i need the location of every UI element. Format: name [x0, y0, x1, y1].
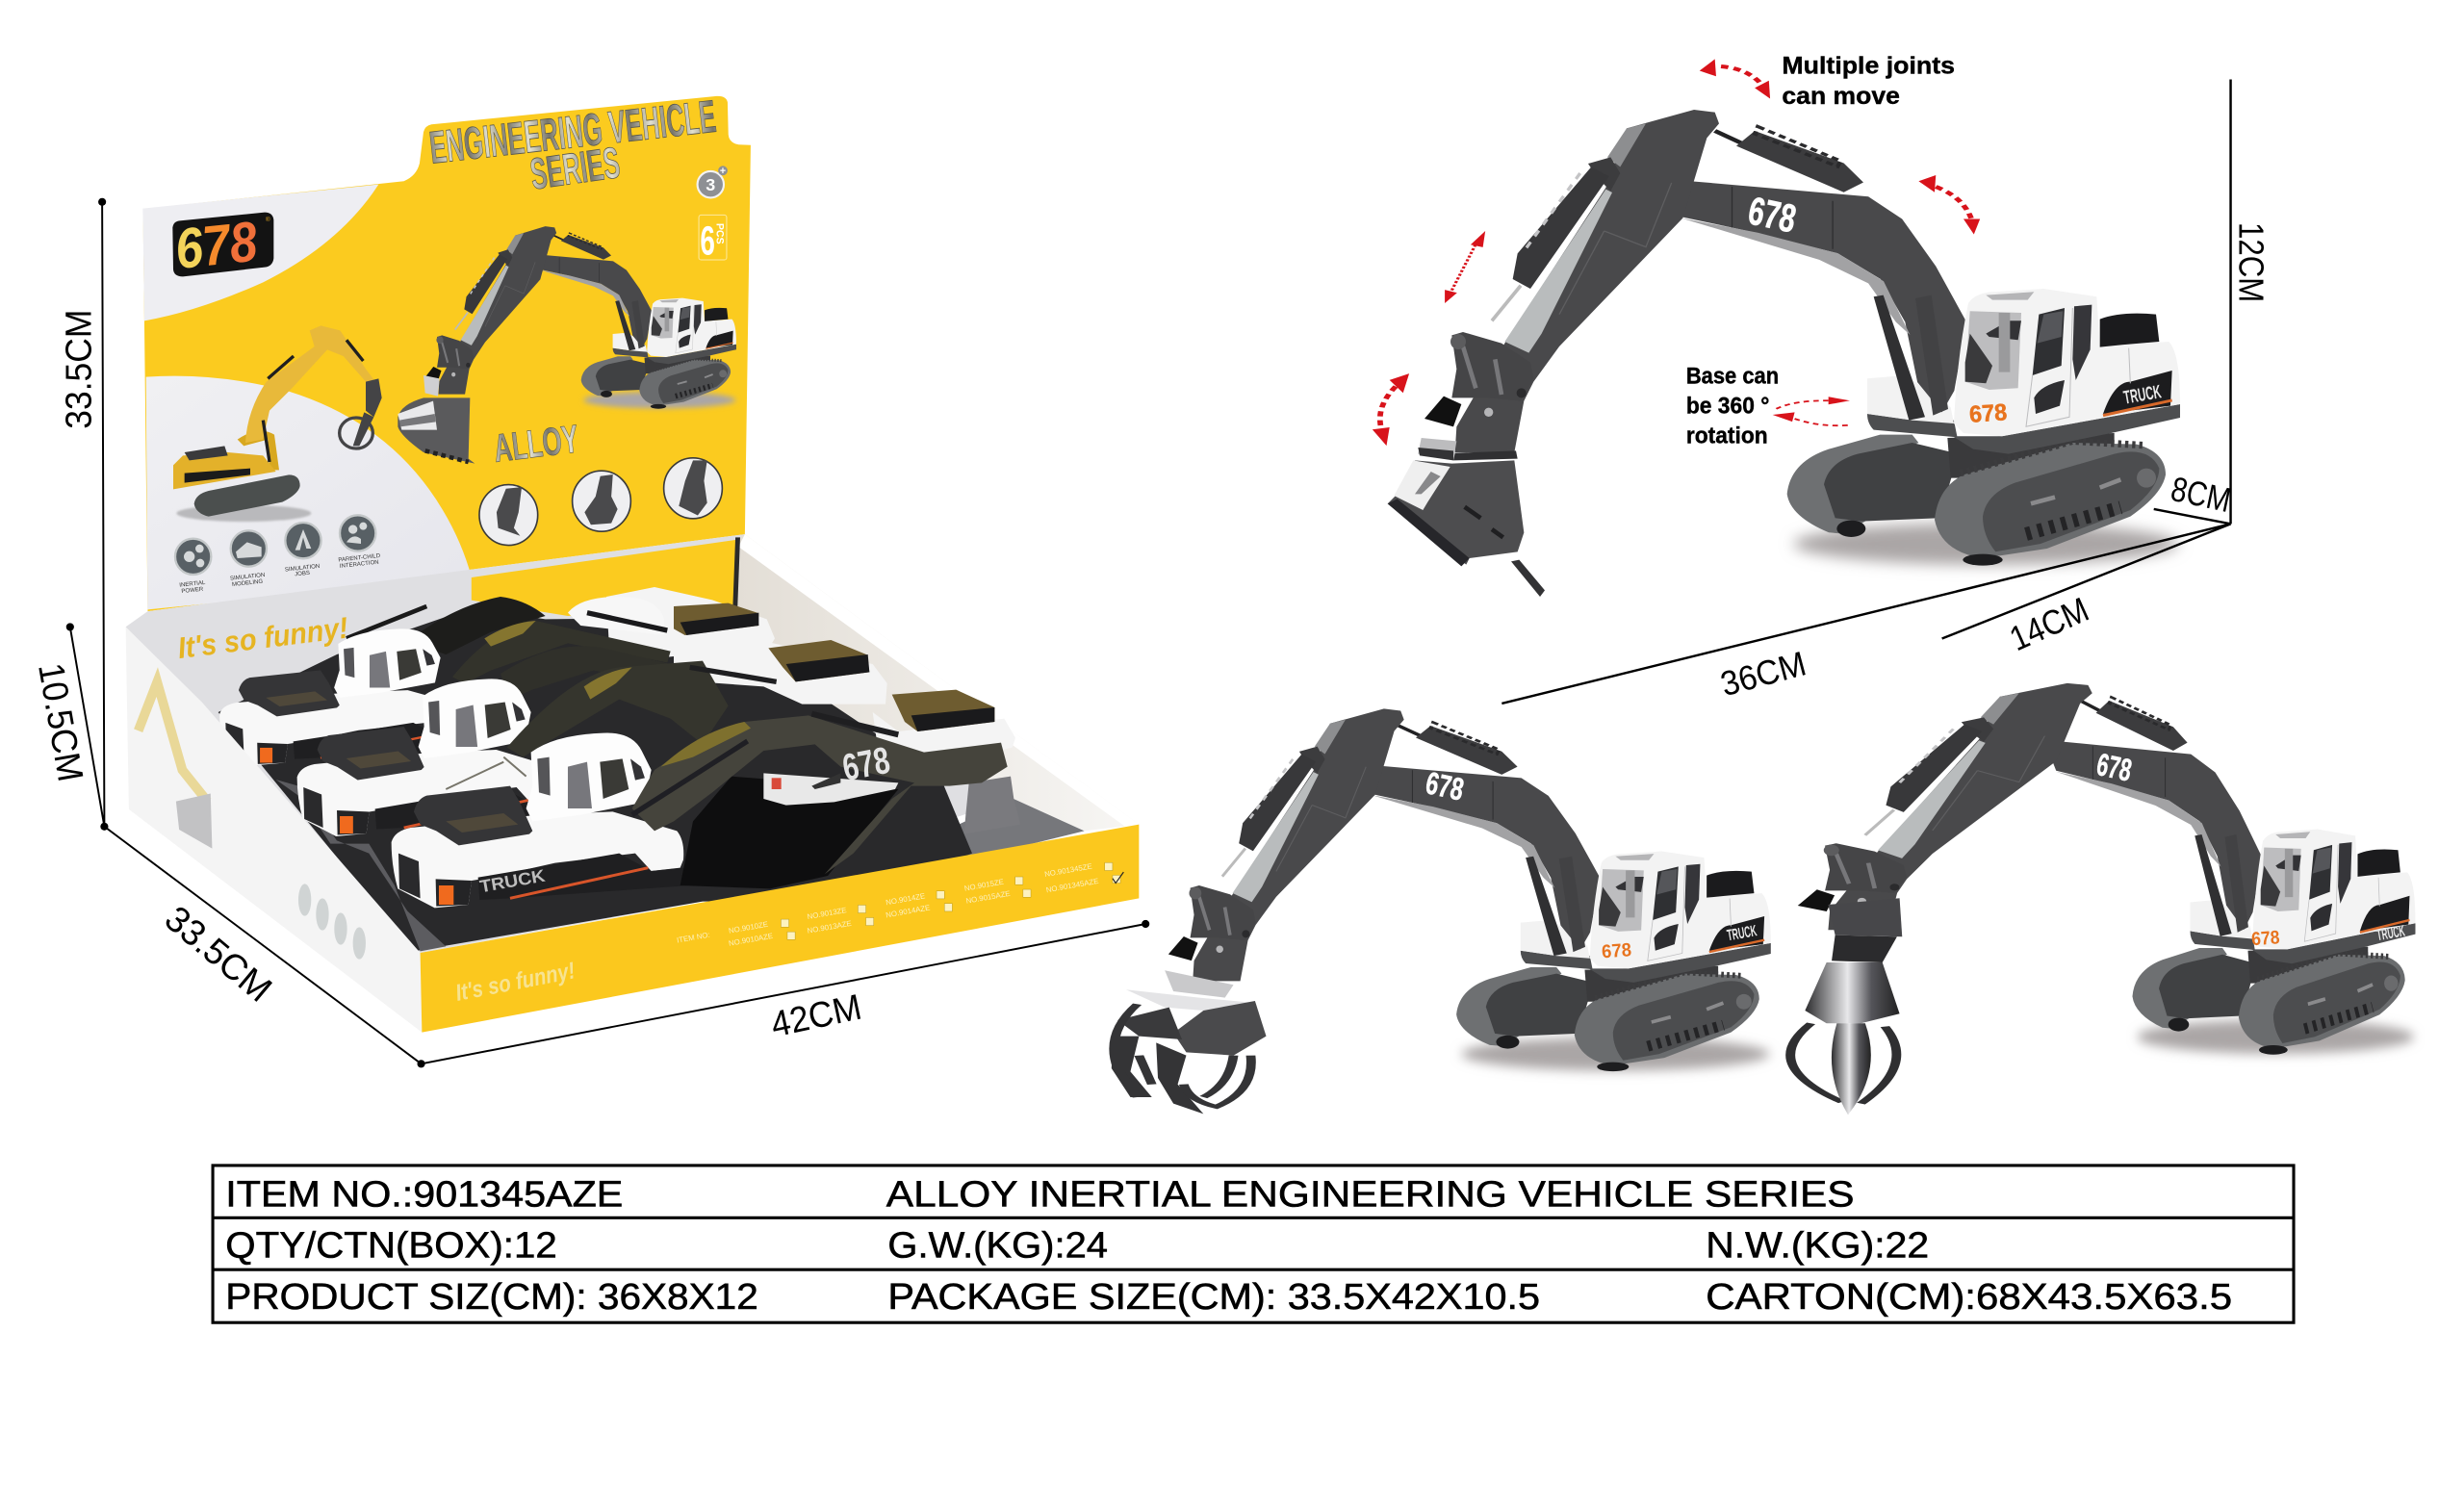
item number list: [676, 861, 1099, 948]
feature captions: SIMULATION: [285, 564, 321, 574]
left tray wall: [126, 627, 422, 1033]
item number list: NO.901345AZE: [1045, 877, 1099, 894]
six pieces badge: 6: [700, 218, 715, 263]
yellow excavator on box: [173, 325, 382, 522]
six pieces badge: PCS: [713, 223, 725, 244]
boom logo: 678: [2093, 746, 2135, 788]
main excavator with breaker: [1388, 110, 2180, 597]
front toy truck label: TRUCK: [478, 866, 547, 896]
table row 3: [225, 1276, 2232, 1317]
front panel slogan: It's so funny!: [453, 958, 578, 1007]
age badge: [698, 166, 728, 197]
feature captions: SIMULATION: [230, 573, 266, 582]
age badge: +: [720, 166, 726, 177]
table grid: [213, 1166, 2294, 1322]
white top-left swoosh: [142, 185, 378, 320]
table row 3: CARTON(CM):68X43.5X63.5: [1706, 1276, 2232, 1317]
table row 2: QTY/CTN(BOX):12: [225, 1225, 557, 1266]
tray slogan: It's so funny!: [176, 611, 350, 665]
product dimension labels: 36CM: [1716, 643, 1810, 704]
ALLOY label: ALLOY: [491, 417, 581, 471]
callout: multiple joints: can move: [1782, 83, 1900, 110]
excavator body: [1362, 723, 1771, 1071]
table row 2: G.W.(KG):24: [887, 1225, 1108, 1266]
item number list: NO.9010AZE: [728, 932, 774, 948]
breaker attachment: [1388, 438, 1545, 597]
feature captions: PARENT-CHILD: [338, 553, 381, 564]
wood grapple: [1112, 970, 1267, 1114]
excavator with chrome grab: [1790, 683, 2415, 1114]
right tray wall: [732, 534, 1139, 861]
callout: multiple joints: Multiple joints: [1782, 53, 1955, 80]
callout: base rotation: be 360 °: [1686, 393, 1769, 419]
feature captions: [179, 553, 381, 595]
cab logo: 678: [1968, 399, 2008, 428]
boom logo: 678: [1745, 188, 1800, 242]
table row 2: N.W.(KG):22: [1706, 1225, 1929, 1266]
back row engine covers: [606, 587, 1020, 879]
cab logo: 678: [2250, 927, 2280, 950]
brand logo: 678: [172, 211, 261, 281]
truck label: TRUCK: [2122, 381, 2163, 409]
tray floor: [218, 608, 972, 951]
front yellow panel: [421, 825, 1139, 1033]
age badge: 3: [706, 175, 715, 194]
back panel with header tab: [143, 96, 751, 611]
feature captions: INERTIAL: [179, 580, 206, 589]
item number list: NO.9015ZE: [963, 878, 1005, 893]
front toy boom logo: 678: [839, 740, 893, 789]
feature captions: POWER: [181, 587, 204, 595]
attachment icons: [479, 458, 722, 546]
brand logo: ®: [266, 216, 270, 223]
product dimension labels: 14CM: [2004, 589, 2094, 658]
box dimension labels: 10.5CM: [31, 660, 91, 784]
box dimension labels: 42CM: [767, 986, 865, 1044]
table row 3: PRODUCT SIZ(CM): 36X8X12: [225, 1276, 758, 1317]
callout: base rotation: Base can: [1686, 363, 1779, 389]
feature captions: JOBS: [295, 571, 310, 577]
item number list: NO.9015AZE: [965, 889, 1011, 906]
item number list: NO.9014AZE: [886, 903, 931, 919]
product dimension labels: 12CM: [2232, 222, 2272, 302]
excavator arm: [1798, 683, 2092, 930]
item number list: NO.9010ZE: [728, 920, 769, 935]
excavator with grapple: [1112, 708, 1771, 1114]
item number list: NO.901345ZE: [1043, 861, 1092, 879]
callout: base rotation: [1686, 363, 1779, 448]
box dimension lines: [66, 198, 1149, 1067]
excavator body: [1669, 127, 2180, 566]
series title: ENGINEERING VEHICLE: [427, 91, 718, 174]
digger bucket: [398, 375, 475, 464]
table row 1: ALLOY INERTIAL ENGINEERING VEHICLE SERIES: [886, 1173, 1855, 1214]
excavator arm: [1424, 110, 1719, 452]
specification table: [213, 1166, 2294, 1322]
item number list: NO.9014ZE: [886, 891, 926, 907]
box dimension labels: 33.5CM: [59, 310, 99, 429]
chrome grab: [1790, 898, 1902, 1114]
item number list: NO.9013ZE: [807, 906, 847, 921]
table row 2: [225, 1225, 1929, 1266]
front toy arm: [632, 667, 1008, 888]
grey excavator on box: [398, 226, 736, 464]
faded feature icons on tray wall: [298, 884, 366, 960]
lower fold of yellow back panel: [472, 539, 742, 616]
excavator body: [2047, 697, 2415, 1055]
box dimension labels: [31, 310, 865, 1044]
packaging display box: [126, 91, 1139, 1033]
box dimension labels: 33.5CM: [158, 898, 280, 1010]
cab logo: 678: [1601, 939, 1632, 962]
item number list: NO.9013AZE: [807, 919, 852, 935]
white lower-left swoosh: [146, 376, 472, 609]
table row 3: PACKAGE SIZE(CM): 33.5X42X10.5: [887, 1276, 1540, 1317]
excavator arm: [1168, 708, 1404, 981]
item number list: ITEM NO:: [676, 931, 710, 945]
table row 1: ITEM NO.:901345AZE: [225, 1173, 623, 1214]
tray interior back: [126, 534, 1014, 953]
callout: base rotation: rotation: [1686, 423, 1768, 448]
series title: [427, 91, 718, 199]
feature captions: INTERACTION: [340, 560, 379, 570]
table row 1: [225, 1173, 1855, 1214]
boom logo: 678: [1423, 764, 1467, 807]
callout: multiple joints: [1782, 53, 1955, 110]
truck label: TRUCK: [2375, 922, 2406, 944]
item checkboxes: [781, 862, 1123, 939]
feature icons: [175, 515, 375, 575]
product dimension labels: [1716, 222, 2272, 704]
truck label: TRUCK: [1726, 922, 1758, 944]
back toys and arms: [219, 597, 729, 908]
product dimension labels: 8CM: [2168, 469, 2234, 520]
feature captions: MODELING: [232, 579, 264, 588]
product dimension lines: [1502, 79, 2231, 704]
faded excavator on tray wall: [139, 682, 212, 849]
series title: SERIES: [527, 138, 623, 199]
motion arrows: [1373, 59, 1980, 446]
